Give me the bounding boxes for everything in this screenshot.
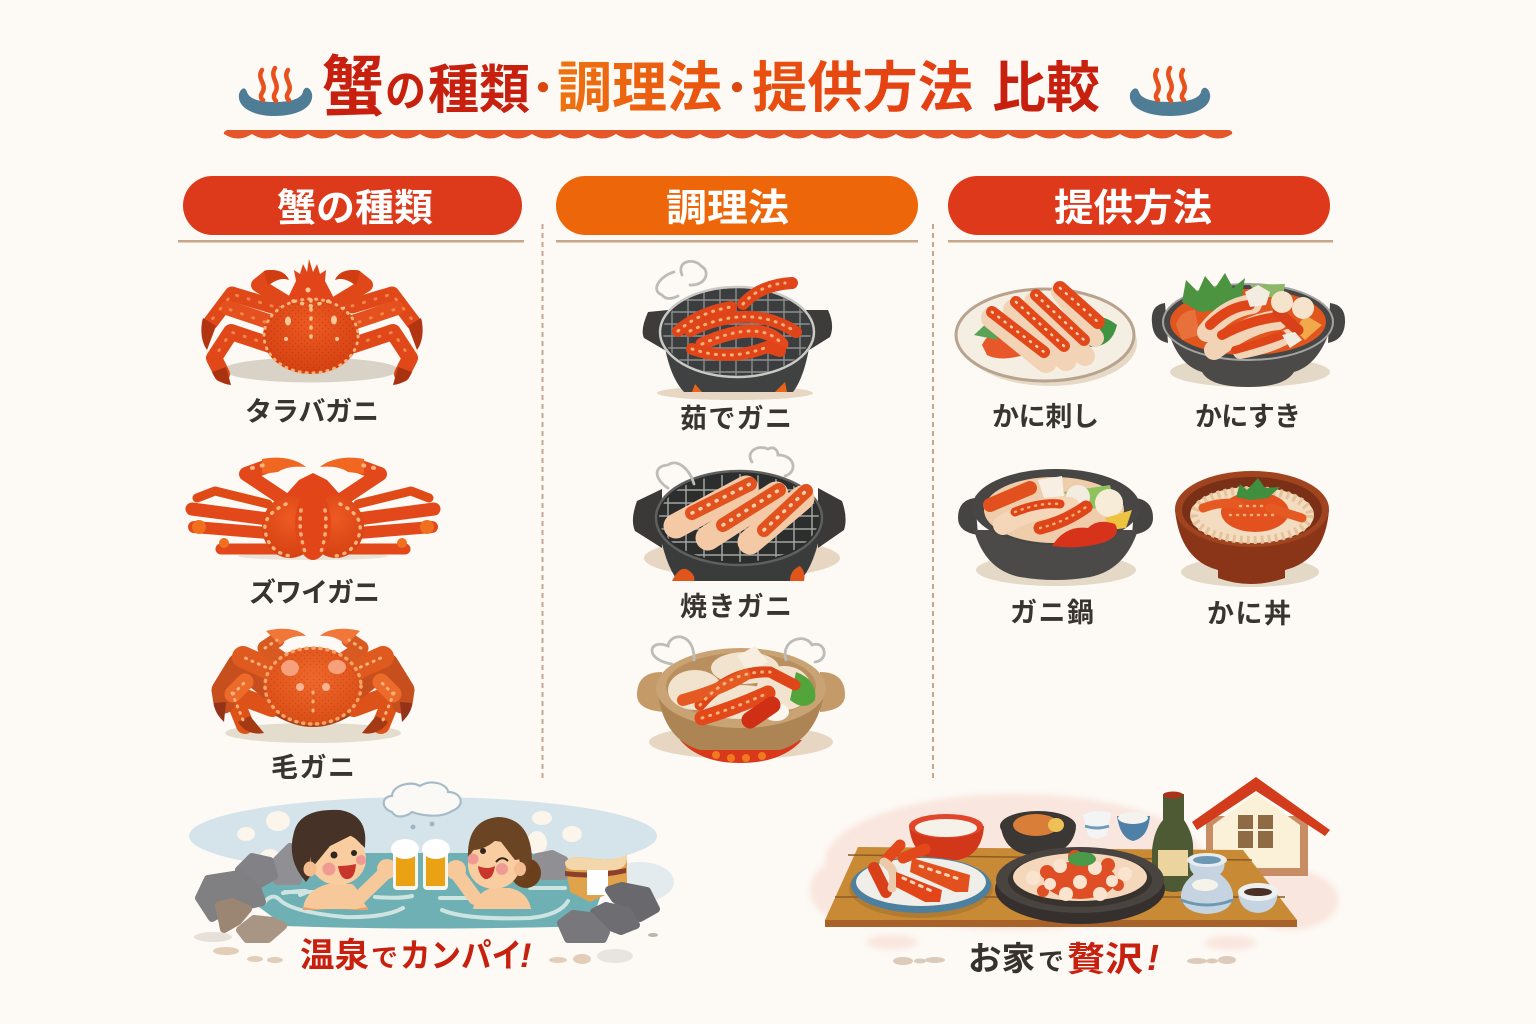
title part: crab: 蟹 bbox=[322, 50, 384, 124]
hot spring water bbox=[245, 853, 602, 928]
rocks right and bucket bbox=[537, 854, 656, 939]
heading: crab types: 蟹の種類 bbox=[277, 188, 433, 230]
icon: soy sauce dish bbox=[1238, 883, 1278, 913]
title separator: ・ bbox=[717, 67, 757, 111]
caption: home part 3: 贅沢 bbox=[1067, 941, 1143, 979]
title part: kinds: 種類 bbox=[428, 61, 530, 120]
icon: grilled crab pan bbox=[633, 447, 846, 581]
icon: sake cups bbox=[1083, 811, 1150, 841]
label: hairy crab: 毛ガニ bbox=[271, 753, 355, 783]
icon: hairy crab bbox=[214, 629, 412, 743]
panel: cooking methods bbox=[556, 176, 918, 763]
icon: crab rice bowl bbox=[1175, 471, 1329, 587]
ornament left bbox=[893, 957, 945, 965]
rocks left bbox=[199, 847, 298, 939]
icon: crab sashimi plate bbox=[956, 288, 1137, 386]
panel: crab types bbox=[178, 176, 524, 783]
icon: onsen symbol right bbox=[1130, 68, 1210, 116]
icon: boiled crab pot bbox=[643, 261, 832, 400]
title banner bbox=[224, 50, 1232, 138]
panel: serving methods bbox=[948, 176, 1345, 629]
title part: no: の bbox=[385, 67, 426, 116]
caption: home exclamation: ! bbox=[1147, 937, 1159, 978]
ornament right bbox=[1187, 956, 1236, 964]
icon: taraba crab bbox=[201, 259, 423, 385]
column dividers bbox=[542, 224, 933, 778]
title part: serving method: 提供方法 bbox=[752, 57, 973, 119]
heading: serving methods bbox=[948, 176, 1333, 242]
icon: crab sukiyaki bbox=[1152, 273, 1345, 387]
person: man bbox=[292, 810, 397, 910]
icon: sake jug bbox=[1181, 853, 1233, 914]
wavy underline bbox=[224, 130, 1232, 138]
caption: home part 2: で bbox=[1038, 948, 1064, 976]
person: woman bbox=[446, 817, 541, 909]
title separator: ・ bbox=[523, 67, 563, 111]
illustration: luxury at home bbox=[810, 777, 1338, 979]
icon: crab hot pot bbox=[958, 469, 1153, 586]
ground pebbles right bbox=[549, 933, 658, 964]
heading: serving methods: 提供方法 bbox=[1054, 188, 1212, 230]
heading: cooking methods: 調理法 bbox=[666, 188, 789, 230]
label: taraba crab: タラバガニ bbox=[245, 397, 379, 427]
label: crab hot pot: ガニ鍋 bbox=[1010, 598, 1094, 628]
icon: house bbox=[1192, 777, 1330, 876]
icon: beer mugs bbox=[391, 839, 450, 890]
icon: snow crab bbox=[192, 458, 434, 560]
ground pebbles left bbox=[194, 932, 283, 963]
label: crab sukiyaki: かにすき bbox=[1195, 402, 1301, 432]
icon: sake bottle bbox=[1152, 792, 1193, 892]
caption: home part 1: お家 bbox=[968, 940, 1035, 977]
label: grilled crab: 焼きガニ bbox=[680, 592, 792, 622]
label: snow crab: ズワイガニ bbox=[249, 577, 380, 608]
label: crab rice bowl: かに丼 bbox=[1207, 599, 1291, 629]
icon: rice bowl bbox=[909, 814, 984, 860]
icon: main pan bbox=[995, 847, 1165, 924]
caption: onsen part 3: カンパイ bbox=[400, 937, 522, 974]
icon: onsen symbol left bbox=[239, 68, 312, 116]
label: boiled crab: 茹でガニ bbox=[680, 404, 792, 434]
title part: comparison: 比較 bbox=[992, 57, 1100, 119]
caption: onsen part 1: 温泉 bbox=[300, 937, 369, 975]
caption: onsen part 2: で bbox=[371, 943, 398, 973]
heading: crab types bbox=[178, 176, 524, 242]
icon: thought cloud bbox=[384, 782, 461, 830]
caption: onsen exclamation: ! bbox=[520, 937, 531, 975]
label: crab sashimi: かに刺し bbox=[992, 402, 1099, 432]
wooden table bbox=[825, 847, 1297, 927]
illustration: toasting in the hot spring bbox=[189, 782, 674, 975]
icon: black side dish bbox=[1000, 811, 1076, 855]
icon: crab plate bbox=[849, 845, 993, 918]
icon: crab stew clay pot bbox=[637, 637, 845, 763]
heading: cooking methods bbox=[556, 176, 918, 242]
title part: cooking method: 調理法 bbox=[557, 57, 722, 119]
